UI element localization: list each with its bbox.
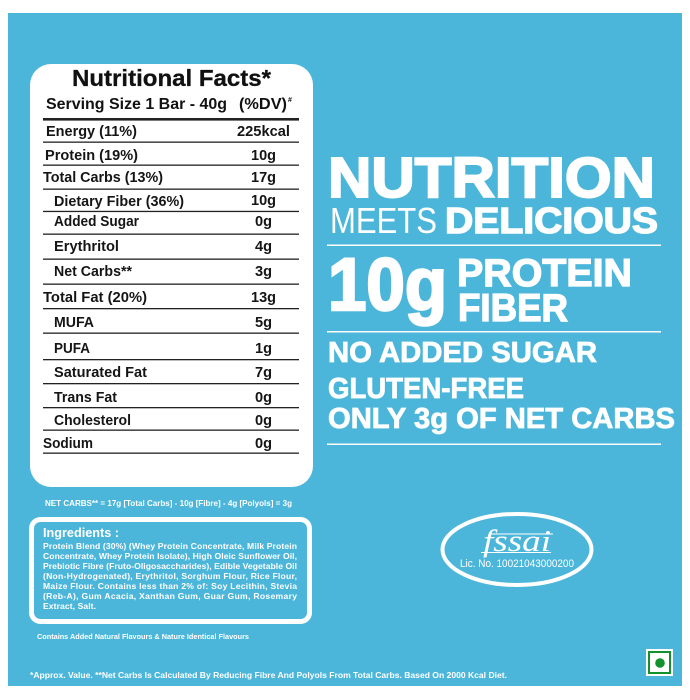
headline: nutrition: NUTRITION [328, 146, 655, 210]
licence number: Lic. No. 10021043000200 [460, 558, 574, 570]
logo: fssai: fssai [483, 523, 551, 558]
flavours note: Contains Added Natural Flavours & Nature Identical Flavours [37, 632, 249, 641]
nutrition rows: Erythritol [54, 239, 119, 255]
nutrition rows: 10g [251, 193, 276, 209]
icon: vegetarian mark [646, 649, 673, 676]
ingredients heading: Ingredients : [43, 525, 119, 540]
ingredients text: (Reb-A), Gum Acacia, Xanthan Gum, Guar Gum, Rosemary [43, 591, 297, 601]
nutrition rows: Cholesterol [54, 413, 131, 429]
ingredients text: Extract, Salt. [43, 601, 96, 611]
serving size line: (%DV) [239, 96, 287, 113]
nutrition rows: Added Sugar [54, 214, 139, 230]
claim: fiber: FIBER [458, 287, 568, 330]
nutrition rows: Saturated Fat [54, 365, 147, 381]
table rules [43, 118, 299, 454]
nutrition rows: 13g [251, 290, 276, 306]
nutrition rows: 225kcal [237, 124, 290, 140]
ingredients text: (Non-Hydrogenated), Erythritol, Sorghum Flour, Rice Flour, [43, 571, 297, 581]
nutrition rows: 1g [255, 341, 272, 357]
headline: meets delicious: DELICIOUS [445, 200, 658, 241]
nutrition rows: 10g [251, 148, 276, 164]
claim: net carbs: ONLY 3g OF NET CARBS [328, 403, 675, 435]
ingredients text [43, 541, 297, 611]
serving size line: Serving Size 1 Bar - 40g [46, 96, 227, 113]
nutrition rows: 3g [255, 264, 272, 280]
ingredients text: Maize Flour. Contains less than 2% of: Soy Lecithin, Stevia [43, 581, 297, 591]
nutrition rows: 0g [255, 214, 272, 230]
headline: meets delicious [330, 200, 658, 241]
nutrition rows [43, 124, 290, 452]
nutrition rows: 0g [255, 413, 272, 429]
nutrition rows: MUFA [54, 315, 94, 331]
nutrition rows: 0g [255, 390, 272, 406]
footnote: *Approx. Value. **Net Carbs Is Calculated By Reducing Fibre And Polyols From Total Carbs. Based On 2000 Kcal Diet. [30, 670, 507, 680]
nutrition rows: Protein (19%) [45, 148, 138, 164]
nutrition rows: Trans Fat [54, 390, 117, 406]
panel: nutritional facts [30, 64, 313, 487]
divider 1 [327, 244, 661, 246]
nutrition rows: Energy (11%) [46, 124, 137, 140]
net carbs formula: NET CARBS** = 17g [Total Carbs] - 10g [Fibre] - 4g [Polyols] = 3g [45, 498, 292, 508]
claim: no added sugar: NO ADDED SUGAR [328, 337, 597, 369]
panel: ingredients [32, 520, 310, 622]
logo: fssai [442, 514, 592, 585]
heading: nutritional facts: Nutritional Facts* [72, 65, 272, 91]
nutrition rows: Dietary Fiber (36%) [54, 194, 184, 210]
nutrition rows: Total Fat (20%) [43, 290, 147, 306]
ingredients text: Protein Blend (30%) (Whey Protein Concentrate, Milk Protein [43, 541, 297, 551]
claim: 10g: 10g [328, 243, 447, 326]
nutrition rows: 4g [255, 239, 272, 255]
claim: protein: PROTEIN [457, 252, 632, 295]
headline: meets delicious: MEETS [330, 200, 437, 241]
ingredients text: Concentrate, Whey Protein Isolate), High Oleic Sunflower Oil, [43, 551, 297, 561]
divider 3 [327, 444, 661, 445]
nutrition rows: 7g [255, 365, 272, 381]
nutrition rows: Total Carbs (13%) [43, 170, 163, 186]
divider 2 [327, 331, 661, 332]
ingredients text: Prebiotic Fibre (Fruto-Oligosaccharides), Edible Vegetable Oil [43, 561, 297, 571]
serving size line: # [288, 97, 292, 104]
nutrition rows: PUFA [54, 341, 90, 357]
claim: gluten-free: GLUTEN-FREE [328, 373, 524, 405]
nutrition rows: Net Carbs** [54, 264, 132, 280]
nutrition rows: 5g [255, 315, 272, 331]
nutrition rows: 17g [251, 170, 276, 186]
nutrition rows: Sodium [43, 436, 93, 452]
nutrition rows: 0g [255, 436, 272, 452]
